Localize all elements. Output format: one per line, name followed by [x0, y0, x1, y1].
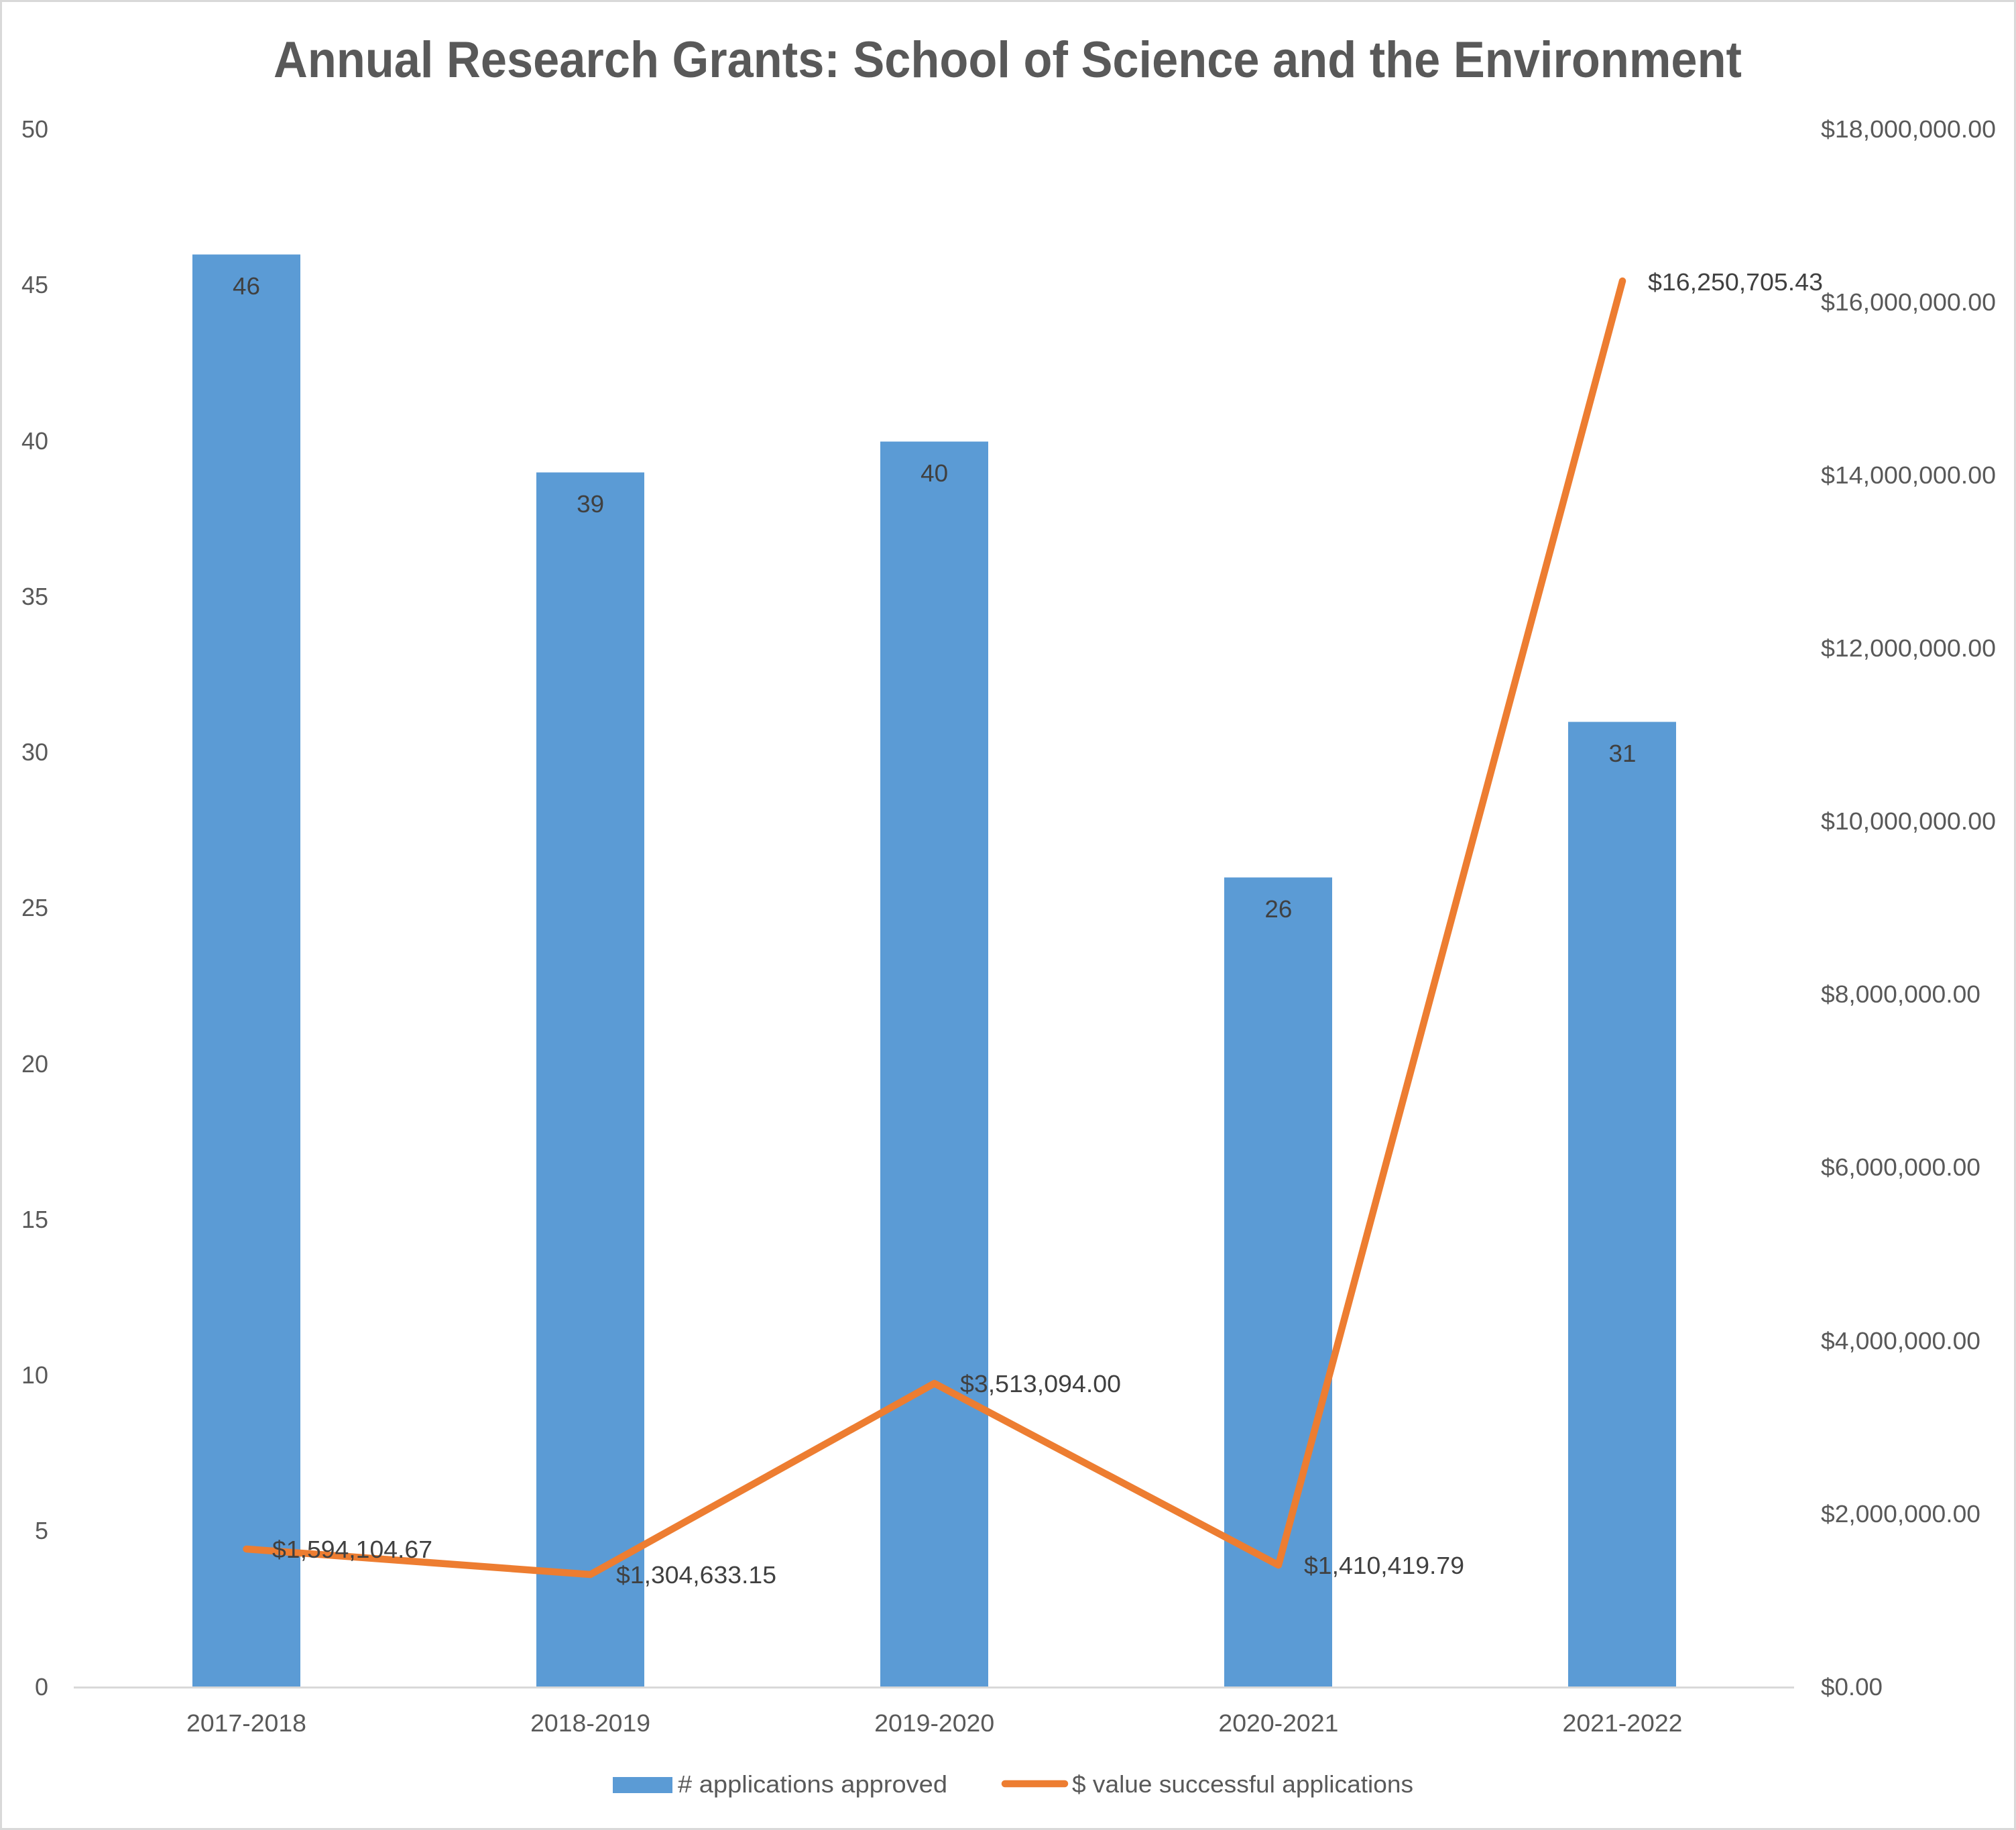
x axis line: [74, 1686, 1794, 1689]
legend label: bars: # applications approved: [678, 1770, 947, 1798]
left axis: number of applications: 5: [35, 1517, 48, 1544]
x axis year labels: 2017-2018: [186, 1709, 306, 1737]
line data labels: $1,304,633.15: [616, 1561, 776, 1589]
bar data labels: 39: [577, 490, 604, 518]
left axis: number of applications: 25: [21, 894, 48, 921]
left axis: number of applications: 45: [21, 271, 48, 298]
line data labels: $3,513,094.00: [960, 1370, 1121, 1397]
x axis year labels: 2019-2020: [874, 1709, 994, 1737]
legend label: line: $ value successful applications: [1072, 1770, 1413, 1798]
right axis: dollar value: $8,000,000.00: [1821, 980, 1980, 1008]
x axis year labels: 2018-2019: [530, 1709, 650, 1737]
bar data labels: 40: [921, 459, 948, 487]
right axis: dollar value: $6,000,000.00: [1821, 1153, 1980, 1181]
bar data labels: 46: [233, 272, 260, 300]
left axis: number of applications: 40: [21, 427, 48, 455]
bars: applications approved: [192, 255, 1676, 1686]
left axis: number of applications: 30: [21, 738, 48, 766]
legend swatch: bars: [613, 1777, 672, 1793]
bar data labels: 31: [1609, 740, 1636, 767]
x axis year labels: 2021-2022: [1562, 1709, 1683, 1737]
right axis: dollar value: $18,000,000.00: [1821, 115, 1996, 143]
right axis: dollar value: $2,000,000.00: [1821, 1500, 1980, 1528]
right axis: dollar value: [1821, 115, 1996, 1701]
left axis: number of applications: 10: [21, 1361, 48, 1389]
left axis: number of applications: 15: [21, 1206, 48, 1233]
bar data labels: 26: [1264, 895, 1292, 923]
title: Annual Research Grants: School of Science and the Environment: [274, 32, 1742, 89]
left axis: number of applications: 20: [21, 1050, 48, 1078]
right axis: dollar value: $14,000,000.00: [1821, 461, 1996, 489]
left axis: number of applications: 0: [35, 1673, 48, 1701]
legend: [613, 1770, 1413, 1798]
x axis year labels: 2020-2021: [1218, 1709, 1338, 1737]
line data labels: $1,410,419.79: [1304, 1552, 1464, 1579]
left axis: number of applications: 50: [21, 115, 48, 143]
right axis: dollar value: $4,000,000.00: [1821, 1327, 1980, 1355]
left axis: number of applications: [21, 115, 48, 1701]
x axis year labels: [186, 1709, 1683, 1737]
line data labels: $1,594,104.67: [272, 1536, 432, 1563]
line series: dollar value of successful applications: [247, 281, 1622, 1575]
right axis: dollar value: $12,000,000.00: [1821, 634, 1996, 662]
right axis: dollar value: $16,000,000.00: [1821, 288, 1996, 316]
legend swatch: line: [1005, 1780, 1065, 1787]
bar data labels: [233, 272, 1636, 923]
line data labels: $16,250,705.43: [1648, 268, 1823, 296]
line data labels: [272, 268, 1823, 1589]
right axis: dollar value: $0.00: [1821, 1673, 1883, 1701]
left axis: number of applications: 35: [21, 583, 48, 610]
right axis: dollar value: $10,000,000.00: [1821, 807, 1996, 835]
